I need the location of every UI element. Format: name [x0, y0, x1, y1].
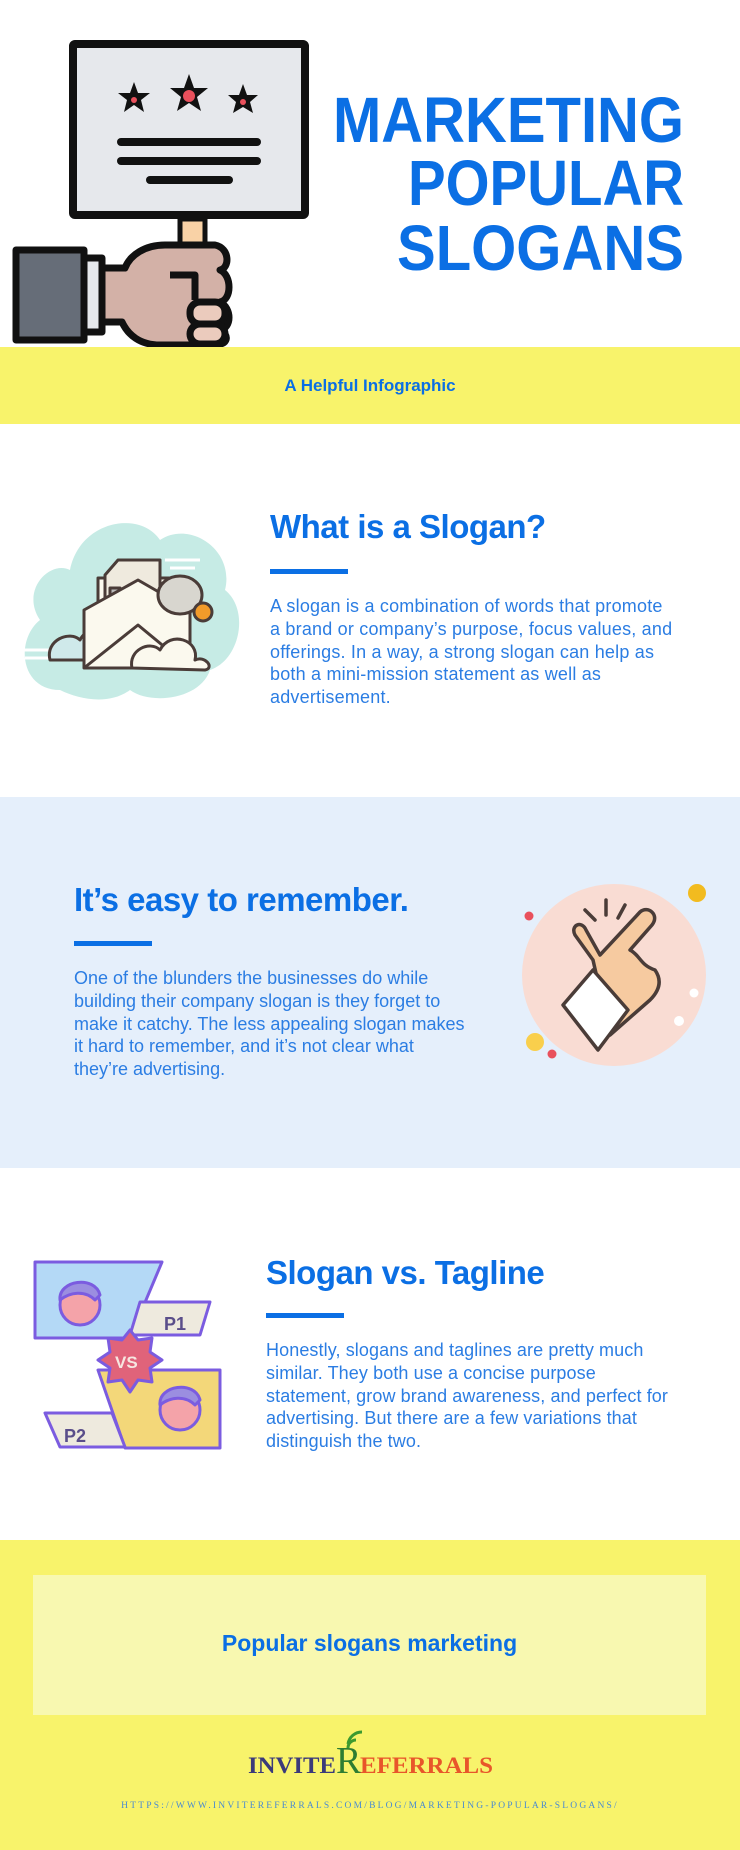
subtitle band: A Helpful Infographic	[284, 376, 456, 395]
heading: What is a Slogan?	[270, 508, 546, 545]
paragraph: Honestly, slogans and taglines are pretty much	[266, 1340, 643, 1360]
paragraph: make it catchy. The less appealing slogan makes	[74, 1014, 465, 1034]
illustration: hand holding sign	[12, 40, 309, 347]
paragraph: they’re advertising.	[74, 1059, 225, 1079]
paragraph: a brand or company’s purpose, focus values, and	[270, 619, 672, 639]
footer	[0, 1540, 740, 1850]
paragraph: similar. They both use a concise purpose	[266, 1363, 596, 1383]
icon: versus: P2	[64, 1426, 86, 1446]
icon: snapping hand	[522, 884, 706, 1066]
heading: It’s easy to remember.	[74, 881, 408, 918]
icon: versus: VS	[115, 1353, 138, 1372]
paragraph: both a mini-mission statement as well as	[270, 664, 601, 684]
section: slogan vs tagline	[34, 1254, 668, 1451]
section: what is a slogan	[24, 508, 672, 707]
section: easy to remember	[0, 797, 740, 1168]
paragraph: statement, grow brand awareness, and perfect for	[266, 1386, 668, 1406]
paragraph: building their company slogan is they forget to	[74, 991, 440, 1011]
paragraph	[266, 1340, 668, 1451]
icon: versus: P1	[164, 1314, 186, 1334]
paragraph	[74, 968, 465, 1079]
paragraph: advertisement.	[270, 687, 391, 707]
heading: Slogan vs. Tagline	[266, 1254, 544, 1291]
logo	[248, 1730, 493, 1780]
paragraph: it hard to remember, and it’s not clear what	[74, 1036, 414, 1056]
logo: INVITE	[248, 1753, 336, 1778]
paragraph: One of the blunders the businesses do while	[74, 968, 428, 988]
url: HTTPS://WWW.INVITEREFERRALS.COM/BLOG/MARKETING-POPULAR-SLOGANS/	[121, 1801, 619, 1811]
paragraph: advertising. But there are a few variations that	[266, 1408, 637, 1428]
title	[333, 85, 684, 280]
stick	[180, 219, 205, 247]
callout box	[33, 1575, 706, 1715]
callout box: Popular slogans marketing	[222, 1630, 517, 1656]
paragraph: A slogan is a combination of words that promote	[270, 596, 663, 616]
subtitle band	[0, 347, 740, 424]
paragraph: offerings. In a way, a strong slogan can help as	[270, 642, 654, 662]
paragraph	[270, 596, 672, 707]
icon: cloud with mail	[24, 523, 240, 700]
fist	[16, 245, 229, 345]
icon: versus	[34, 1260, 222, 1450]
sign board	[73, 44, 305, 215]
paragraph: distinguish the two.	[266, 1431, 421, 1451]
logo: EFERRALS	[360, 1753, 493, 1778]
